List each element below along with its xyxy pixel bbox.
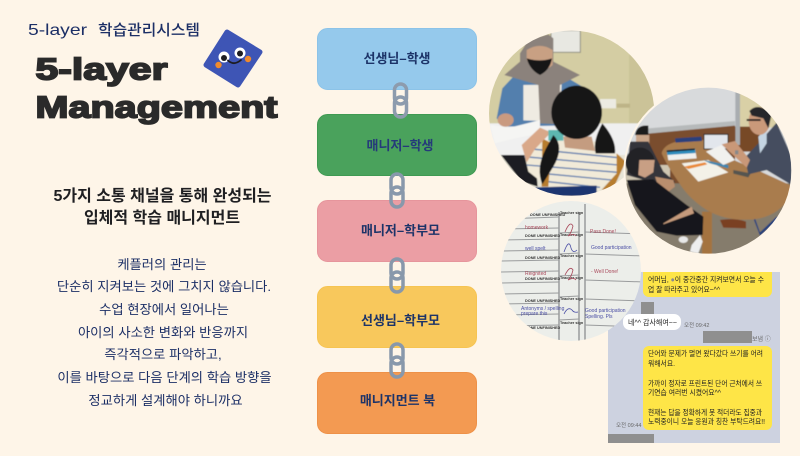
photo: signed teacher notes: Teacher sign: [560, 297, 584, 301]
channel box: teacher-parent: [318, 286, 476, 348]
photo: signed teacher notes: DONE UNFINISHED: [525, 234, 560, 238]
chat bubble: thanks reply: [623, 314, 681, 330]
photo: signed teacher notes: Antonyms / spelling: [521, 306, 565, 312]
chat bubble: detailed feedback: 가까이 정자로 프린트된 단어 근처에서 쓰: [648, 378, 762, 388]
chat bubble: detailed feedback: 워해서요.: [648, 358, 675, 368]
chat bubble: detailed feedback: 노력중이니 오늘 응원과 칭찬 부탁드려요!!: [648, 416, 765, 426]
main title: [36, 52, 278, 124]
chat bubble: thanks reply: 네^^ 감사해여~~: [628, 317, 678, 327]
channel box: manager-parent: [318, 200, 476, 262]
channel box: manager-parent: 매니저–학부모: [361, 223, 440, 238]
photo: signed teacher notes: Pass Done!: [590, 229, 616, 235]
channel box: management book: [318, 372, 476, 434]
icon: chain link 1: [394, 84, 406, 117]
channel box: manager-student: [318, 114, 476, 176]
chat bubble: progress message: [643, 272, 772, 297]
channel box: teacher-parent: 선생님–학부모: [361, 313, 440, 328]
photo: signed teacher notes: Reignited: [525, 271, 546, 277]
subtitle: [28, 22, 200, 39]
chat screenshot with parent: 오전 09:44: [616, 421, 641, 429]
icon: smiling blue mascot: [206, 32, 260, 85]
body text: 수업 현장에서 일어나는: [99, 302, 229, 317]
body text: 이를 바탕으로 다음 단계의 학습 방향을: [57, 370, 272, 385]
chat screenshot with parent: 오전 09:42: [684, 321, 709, 329]
photo: signed teacher notes: DONE UNFINISHED: [525, 256, 560, 260]
photo: signed teacher notes: DONE UNFINISHED: [525, 326, 560, 330]
photo: signed teacher notes: DONE UNFINISHED: [525, 277, 560, 281]
icon: chain link 3: [391, 259, 403, 292]
body text: [57, 257, 272, 408]
photo: signed teacher notes: DONE UNFINISHED: [530, 213, 565, 217]
main title: 5-layer: [36, 52, 168, 86]
subtitle: 5-layer: [28, 22, 88, 39]
photo: manager meeting with students: [620, 85, 797, 258]
photo: signed teacher notes: Spelling. Pls: [585, 314, 613, 320]
subtitle: 학습관리시스템: [98, 22, 200, 39]
chat bubble: detailed feedback: 단어와 문제가 멀면 왔다갔다 쓰기를 어려: [648, 348, 763, 358]
channel box: teacher-student: 선생님–학생: [363, 51, 431, 66]
photo: signed teacher notes: Teacher sign: [560, 211, 584, 215]
photo: signed teacher notes: Good participation: [591, 245, 632, 251]
chat screenshot with parent: [608, 262, 780, 443]
channel box: management book: 매니지먼트 북: [360, 393, 435, 408]
chat bubble: progress message: 어머님, ●이 중간중간 지켜보면서 오늘 수: [648, 274, 764, 284]
body text: 단순히 지켜보는 것에 그치지 않습니다.: [57, 279, 271, 294]
chat bubble: detailed feedback: [643, 346, 772, 430]
heading: five communication channels: 5가지 소통 채널을 통해 완성되는: [53, 187, 272, 205]
photo: signed teacher notes: Teacher sign: [560, 233, 584, 237]
photo: signed teacher notes: - Well Done!: [591, 269, 618, 275]
photo: signed teacher notes: Teacher sign: [560, 254, 584, 258]
channel box: teacher-student: [318, 28, 476, 90]
chat screenshot with parent: 보냄 ⓘ: [752, 335, 771, 343]
photo: signed teacher notes: homework: [525, 225, 549, 231]
photo: signed teacher notes: Good participation: [585, 308, 626, 314]
photo: signed teacher notes: Teacher sign: [560, 321, 584, 325]
photo: teacher and student in class: [489, 30, 654, 196]
photo: signed teacher notes: Teacher sign: [560, 276, 584, 280]
channel box: manager-student: 매니저–학생: [366, 138, 434, 153]
photo: signed teacher notes: [501, 201, 641, 341]
body text: 즉각적으로 파악하고,: [104, 347, 222, 362]
body text: 아이의 사소한 변화와 반응까지: [78, 325, 248, 340]
main title: Management: [36, 90, 278, 124]
chat bubble: progress message: 업 잘 따라주고 있어요~^^: [648, 284, 720, 294]
chat bubble: detailed feedback: 기연습 여러번 시켰어요^^: [648, 387, 721, 397]
photo: signed teacher notes: prepare this: [521, 311, 548, 317]
body text: 정교하게 설계해야 하니까요: [88, 393, 243, 408]
photo: signed teacher notes: DONE UNFINISHED: [525, 299, 560, 303]
heading: five communication channels: [53, 187, 272, 227]
icon: chain link 2: [391, 174, 403, 207]
chat bubble: detailed feedback: 현재는 답을 정확하게 못 적더라도 집중과: [648, 407, 762, 417]
photo: signed teacher notes: well spelt: [525, 246, 546, 252]
icon: chain link 4: [391, 344, 403, 377]
body text: 케플러의 관리는: [117, 257, 207, 272]
heading: five communication channels: 입체적 학습 매니지먼트: [84, 209, 240, 227]
